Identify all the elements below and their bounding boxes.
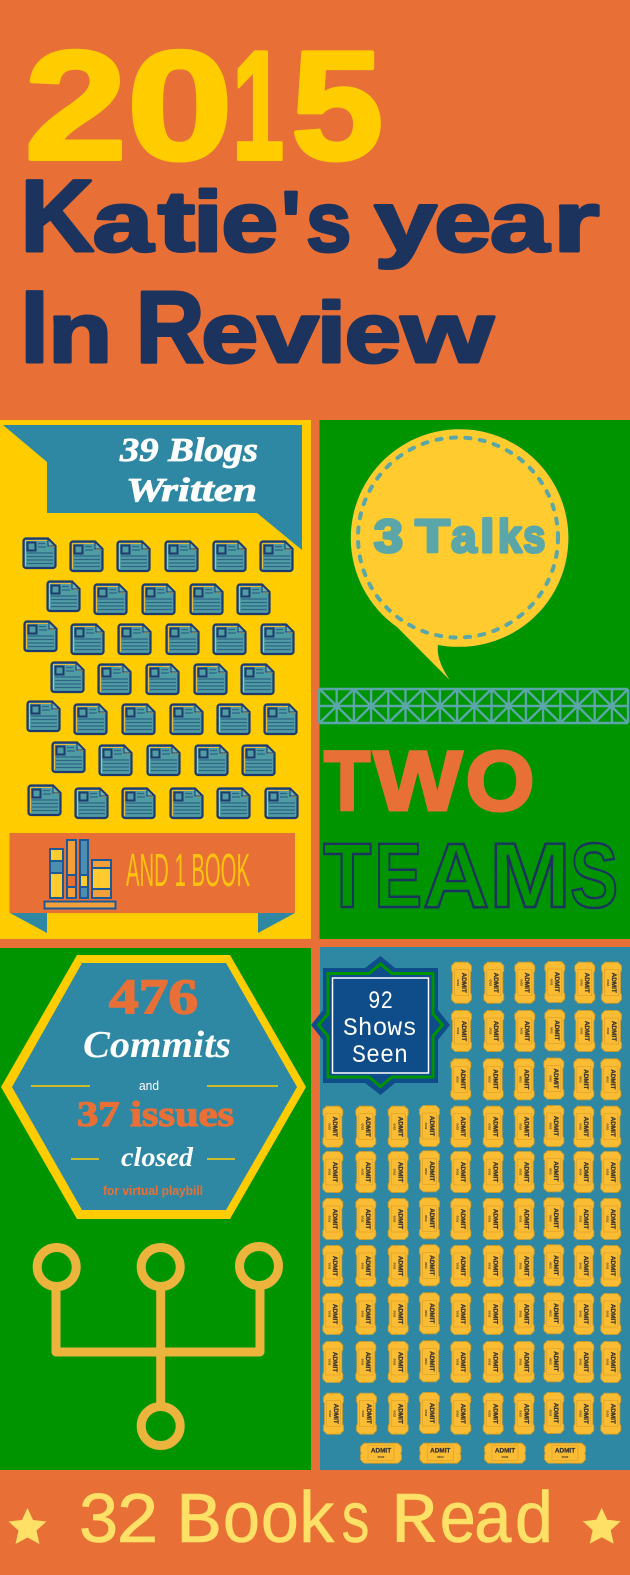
heading: teams outlined: E <box>374 825 422 927</box>
speech bubble: 3 talks: 3 <box>374 510 403 562</box>
ribbon: and 1 book: AND 1 BOOK <box>126 844 250 896</box>
footer: 32 books read: d <box>513 1482 555 1564</box>
title: 2 <box>24 19 127 192</box>
banner: 39 blogs written: Written <box>126 472 257 509</box>
title: n <box>48 286 112 381</box>
title: 5 <box>291 19 383 192</box>
hexagon badge <box>1 955 306 1219</box>
hexagon badge: closed <box>121 1142 194 1172</box>
icons: document grid <box>24 538 298 818</box>
icon: books on shelf <box>44 840 116 908</box>
truss graphic <box>319 689 628 723</box>
heading: teams outlined: M <box>489 825 571 927</box>
hexagon badge: and <box>139 1078 159 1093</box>
footer: 32 books read: 3 <box>77 1482 120 1564</box>
icon: right star <box>583 1508 621 1544</box>
speech bubble: 3 talks <box>351 429 568 680</box>
badge: 92 shows seen <box>311 956 450 1095</box>
badge: 92 shows seen: 92 <box>368 987 393 1016</box>
title: w <box>400 286 495 381</box>
footer: 32 books read: a <box>473 1482 514 1564</box>
footer: 32 books read: k <box>296 1482 338 1564</box>
title: v <box>257 286 319 381</box>
hexagon badge: for virtual playbill <box>103 1183 203 1198</box>
tickets grid <box>323 962 622 1463</box>
panel: shows <box>311 947 630 1470</box>
title <box>20 19 599 384</box>
ribbon: and 1 book <box>10 833 295 933</box>
speech bubble: 3 talks: k <box>498 510 522 562</box>
footer: 32 books read: 2 <box>115 1482 160 1564</box>
title: e <box>434 175 491 270</box>
speech bubble: 3 talks: s <box>523 510 545 562</box>
footer: 32 books read: o <box>222 1482 262 1564</box>
title: a <box>93 175 154 270</box>
banner: 39 blogs written <box>3 425 302 550</box>
panel: blogs <box>0 420 311 939</box>
title: i <box>193 175 223 270</box>
icon: branching tree <box>37 1246 279 1446</box>
speech bubble: 3 talks: a <box>451 510 477 562</box>
title: e <box>201 286 258 381</box>
panel: talks and teams <box>319 420 630 939</box>
heading: teams outlined: T <box>323 825 371 927</box>
hexagon badge: 37 issues <box>77 1094 234 1134</box>
title: t <box>158 175 195 270</box>
title: R <box>136 270 204 384</box>
heading: two: T <box>324 734 370 828</box>
badge: 92 shows seen: Seen <box>352 1041 408 1070</box>
speech bubble: 3 talks: T <box>415 510 450 562</box>
icon: left star <box>8 1508 46 1544</box>
title: s <box>306 175 351 270</box>
footer: 32 books read: e <box>438 1482 477 1564</box>
footer: 32 books read: B <box>176 1482 221 1564</box>
footer: 32 books read <box>8 1482 621 1564</box>
heading: two: W <box>374 734 463 828</box>
hexagon badge: Commits <box>83 1024 231 1066</box>
title: 1 <box>232 19 284 192</box>
title: ' <box>281 175 301 270</box>
heading: teams outlined: S <box>570 825 618 927</box>
title: a <box>490 175 550 270</box>
badge: 92 shows seen: Shows <box>343 1014 417 1043</box>
title: y <box>374 175 437 270</box>
footer: 32 books read: s <box>339 1482 372 1564</box>
title: 0 <box>127 19 233 192</box>
footer: 32 books read: o <box>259 1482 300 1564</box>
title: r <box>553 175 600 270</box>
hexagon badge: 476 <box>109 968 198 1024</box>
footer: 32 books read: R <box>391 1482 437 1564</box>
banner: 39 blogs written: 39 Blogs <box>119 432 258 469</box>
title: I <box>20 270 49 384</box>
panel: commits <box>0 948 311 1470</box>
heading: two: O <box>466 734 535 828</box>
heading: teams outlined: A <box>423 825 489 927</box>
title: e <box>345 286 401 381</box>
title: K <box>20 159 94 273</box>
speech bubble: 3 talks: l <box>480 510 494 562</box>
title: e <box>221 175 278 270</box>
title: i <box>316 286 346 381</box>
